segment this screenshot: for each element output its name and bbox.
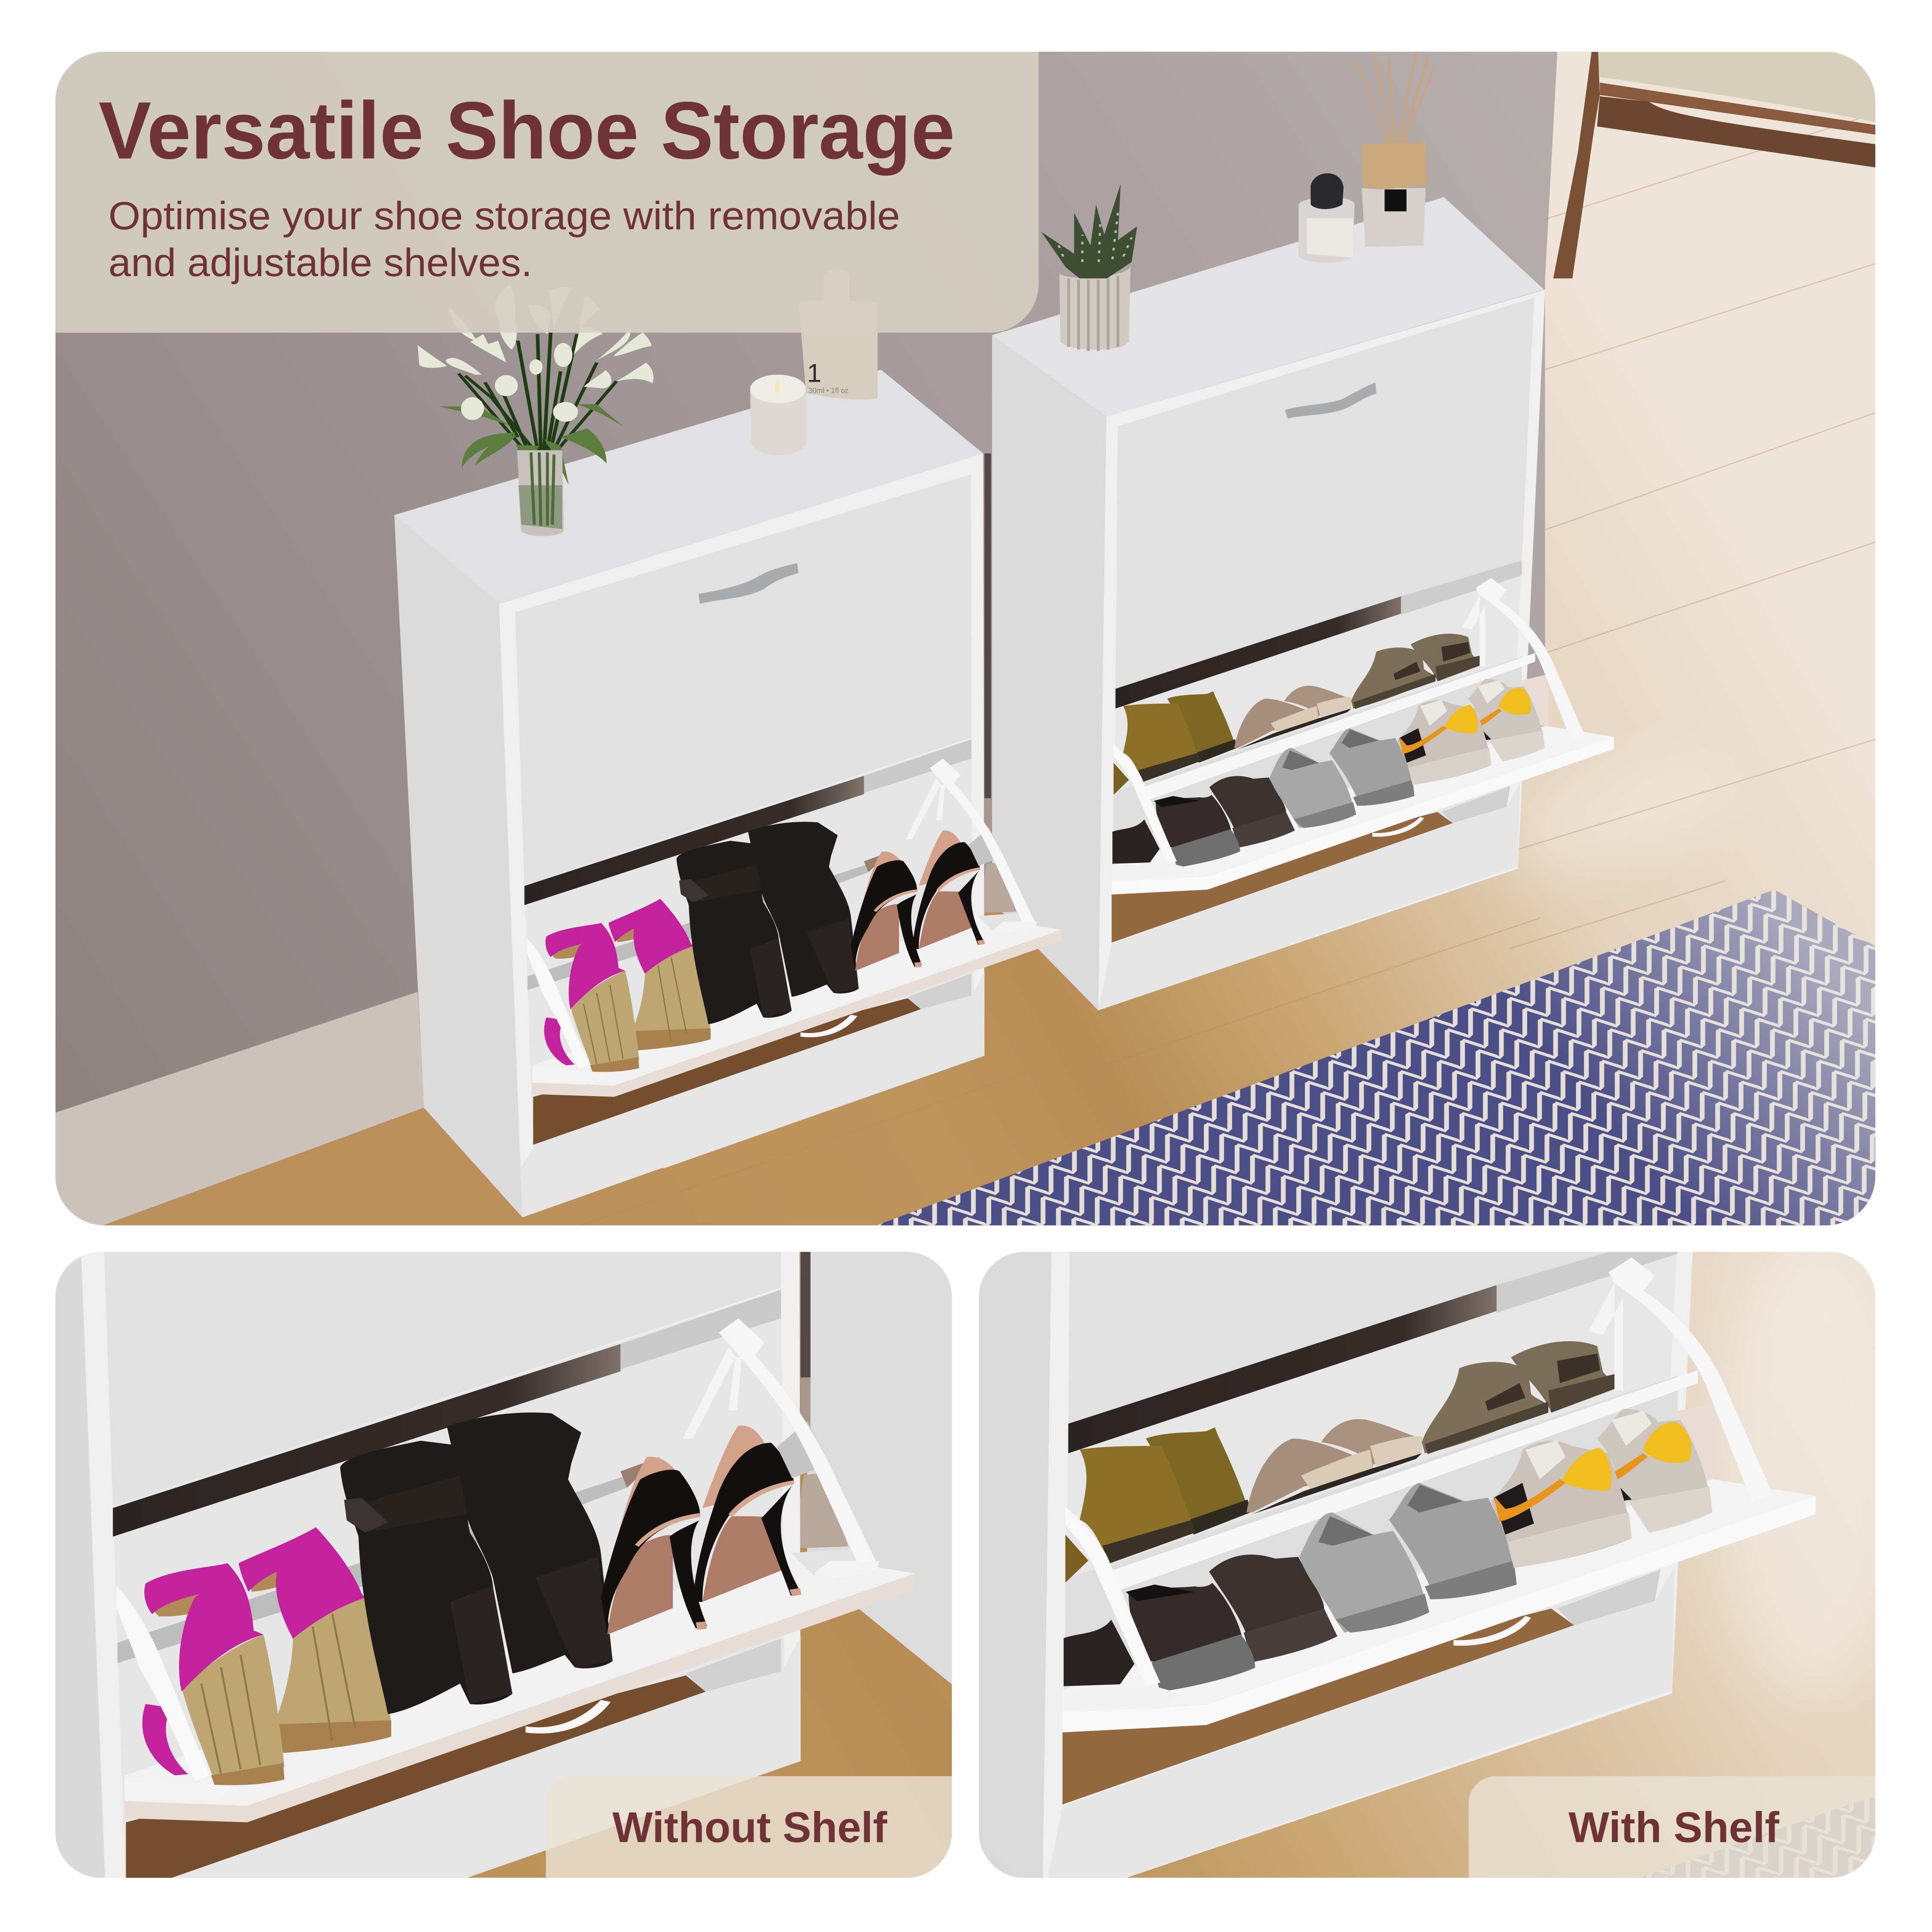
front, flap, interior and shoes	[499, 453, 1061, 1168]
cabinet: left unit without shelf	[394, 370, 1061, 1217]
floor reflection	[533, 998, 921, 1145]
shoes: pink wedge sandals	[544, 899, 711, 1072]
floor	[979, 1252, 1875, 1878]
panel: without shelf close-up	[55, 864, 952, 1929]
plinth lower corner	[520, 1167, 665, 1217]
baseboard	[55, 992, 424, 1226]
wall gap strip	[984, 453, 991, 798]
neighbouring cabinet side	[807, 1252, 952, 1684]
cabinet close-up	[883, 687, 1816, 1906]
chair	[1553, 52, 1876, 279]
title banner	[55, 52, 1039, 333]
cabinet: right unit with shelf	[992, 197, 1614, 1010]
floor highlight	[1713, 1232, 1910, 1700]
lower tier: dark shoes	[1112, 776, 1295, 867]
cabinet 1 decor: bottle: 30ml • 1fl oz	[808, 386, 849, 395]
lower tier: grey shoes	[1270, 728, 1415, 828]
label: with shelf: With Shelf	[1568, 1803, 1780, 1851]
fold-out shelf	[1112, 726, 1614, 895]
heading: Versatile Shoe Storage	[99, 85, 955, 176]
cabinet close-up	[75, 864, 915, 1929]
panel: with shelf close-up	[883, 687, 1910, 1906]
subheading	[109, 194, 900, 285]
cabinet 1 handle	[699, 563, 799, 604]
interior opening	[1112, 561, 1522, 942]
label: without shelf	[546, 1776, 952, 1878]
front frame	[499, 453, 984, 1168]
cabinet 1 decor: candle	[750, 375, 806, 455]
brackets	[527, 759, 1037, 1083]
shoes: black ankle boots	[677, 822, 859, 1024]
floor planks and grain	[579, 113, 1875, 1226]
wall	[55, 52, 1558, 1232]
rug	[875, 890, 1875, 1226]
cabinet 2 handle	[1285, 383, 1376, 419]
cabinet front frame	[1098, 289, 1545, 1010]
cabinet side	[992, 335, 1106, 1010]
cabinet side lower	[979, 1602, 1060, 1878]
pale block behind trainers	[1518, 674, 1549, 726]
upper tier: sandals	[1351, 634, 1482, 709]
floor	[55, 1252, 952, 1878]
floor	[55, 52, 1875, 1232]
interior opening	[524, 739, 974, 1149]
fold-out shelf	[532, 916, 1061, 1097]
brackets	[1112, 578, 1585, 881]
plinth	[1098, 784, 1520, 1010]
shoes: black stilettos	[851, 830, 985, 971]
rug corner	[1640, 1795, 1875, 1878]
cabinet 2 decor: perfume bottle	[1299, 173, 1355, 263]
floor reflection	[1112, 812, 1453, 942]
cabinet side	[394, 515, 522, 1217]
upper tier: tan boots	[1114, 691, 1237, 795]
plinth	[520, 972, 984, 1168]
top flap	[515, 474, 971, 884]
cabinet 1 decor: bottle	[799, 270, 878, 400]
top flap	[1115, 298, 1534, 689]
cabinet top	[992, 197, 1544, 416]
subheading: Optimise your shoe storage with removable	[109, 194, 900, 238]
cabinet 1 decor: bottle: 1	[807, 358, 821, 388]
cabinet top	[394, 370, 983, 604]
panel: main room scene	[55, 52, 1876, 1232]
lower tier: trainers	[1397, 679, 1545, 785]
upper tier: beige flats	[1234, 686, 1351, 749]
cabinet 1 decor: calla lily vase	[418, 285, 653, 536]
label: with shelf	[1469, 1776, 1875, 1878]
shelf bar	[1142, 653, 1535, 801]
cabinet 2 decor: reed diffuser	[1357, 52, 1434, 247]
label: without shelf: Without Shelf	[612, 1803, 887, 1851]
cabinet 2 decor: plant in ribbed pot	[1041, 184, 1137, 351]
cabinet side	[55, 1252, 113, 1878]
subheading: and adjustable shelves.	[109, 241, 532, 285]
